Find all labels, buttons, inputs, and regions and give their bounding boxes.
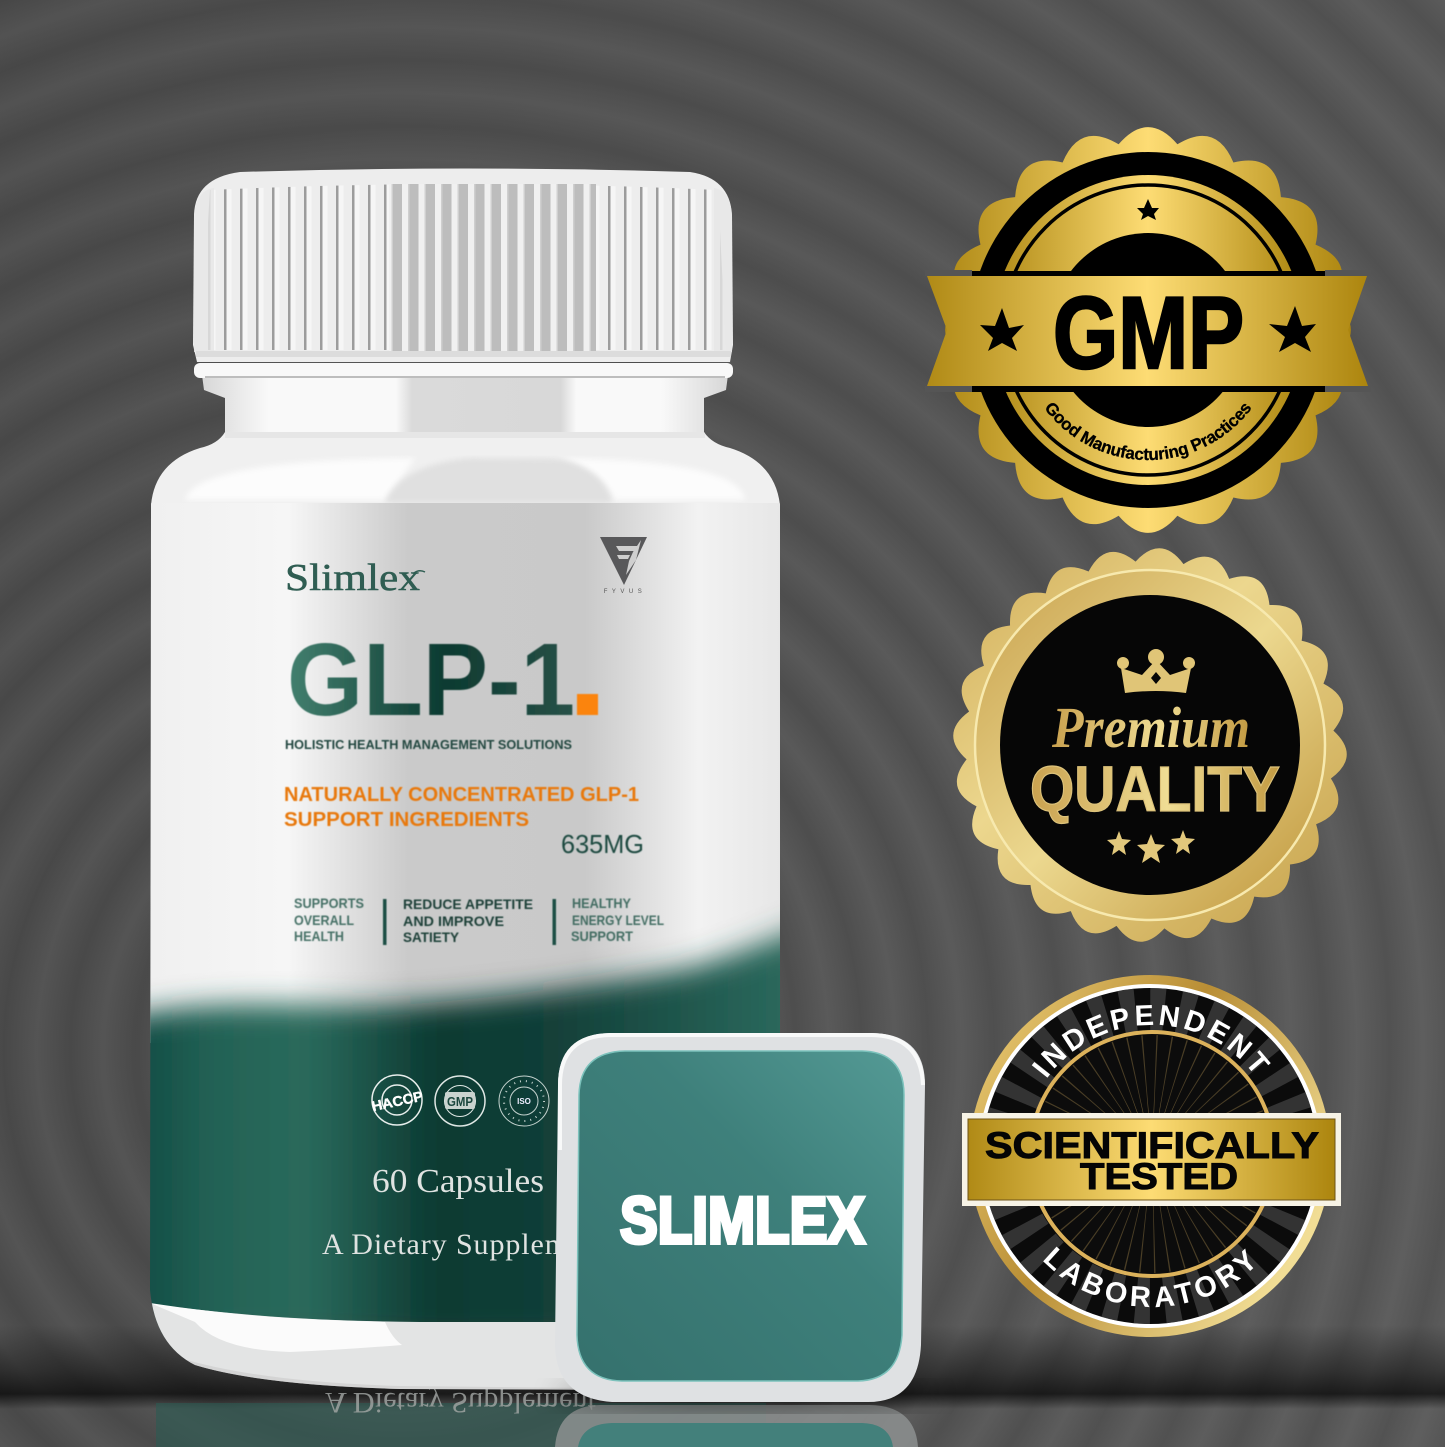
- benefit columns: [294, 895, 664, 945]
- icon: GMP seal: [435, 1076, 485, 1126]
- slimlex box: [555, 1033, 935, 1406]
- benefit 2: SATIETY: [403, 929, 460, 945]
- label text: brand: Slimlex: [285, 557, 420, 599]
- badge: premium quality: [943, 538, 1357, 952]
- stars: [980, 199, 1316, 352]
- benefit 1: [294, 895, 364, 944]
- bottle: [120, 168, 810, 1400]
- badge: GMP: [927, 127, 1368, 533]
- GMP wordmark: GMP: [1053, 276, 1244, 390]
- benefit 3: SUPPORT: [571, 928, 633, 944]
- supplement line: A Dietary Supplement: [322, 1228, 608, 1261]
- product title: GLP-1: [287, 622, 575, 737]
- benefit 3: ENERGY LEVEL: [572, 912, 664, 928]
- certification icons: [370, 1075, 549, 1126]
- icon: ISO seal: [499, 1076, 549, 1126]
- benefit 3: [571, 895, 664, 944]
- orange claim: NATURALLY CONCENTRATED GLP-1: [284, 784, 639, 806]
- bottle body: [150, 432, 780, 1390]
- icon: GMP seal: GMP: [447, 1094, 473, 1109]
- benefit 1: SUPPORTS: [294, 895, 364, 911]
- dosage: 635MG: [561, 831, 644, 859]
- scalloped seal: [943, 538, 1357, 952]
- icon: crown: [1117, 649, 1195, 693]
- badge: scientifically tested: [962, 975, 1341, 1337]
- badge: scientifically tested: LABORATORY: [1043, 1246, 1254, 1308]
- green label band: [120, 925, 810, 1340]
- cap: [193, 168, 733, 378]
- capsule count: 60 Capsules: [372, 1163, 544, 1200]
- cap flange: [194, 363, 733, 378]
- ribbon: [962, 1113, 1341, 1206]
- curved caption: Good Manufacturing Practices: [1046, 403, 1251, 460]
- icon: ISO seal: ISO: [517, 1097, 531, 1106]
- tagline: HOLISTIC HEALTH MANAGEMENT SOLUTIONS: [285, 738, 572, 752]
- benefit 2: AND IMPROVE: [403, 913, 504, 929]
- box frame: [555, 1033, 925, 1402]
- icon: HACCP: HACCP: [370, 1088, 424, 1114]
- orange claim: SUPPORT INGREDIENTS: [284, 809, 529, 831]
- badge: scientifically tested: TESTED: [1080, 1156, 1238, 1197]
- box wordmark: SLIMLEX: [620, 1183, 865, 1257]
- scalloped seal: [945, 127, 1351, 533]
- benefit 2: REDUCE APPETITE: [403, 896, 533, 912]
- sunburst: [1092, 1094, 1212, 1214]
- reflection under bottle: A Dietary Supplement: [325, 1386, 597, 1419]
- premium script: Premium: [1051, 695, 1250, 760]
- reflection under bottle: [156, 1386, 918, 1447]
- ribbon: [927, 276, 1368, 386]
- bottle base: [152, 1304, 574, 1390]
- bottle neck: [202, 375, 728, 440]
- benefit 1: OVERALL: [294, 912, 354, 928]
- ribbon text: SCIENTIFICALLY: [985, 1125, 1319, 1166]
- box face: [577, 1051, 904, 1381]
- benefit 1: HEALTH: [294, 928, 344, 944]
- orange claim: [284, 784, 639, 831]
- stars: [1107, 830, 1195, 863]
- quality word: QUALITY: [1030, 753, 1280, 825]
- icon: HACCP: [370, 1075, 424, 1125]
- icon: FYVUS logo: FYVUS: [604, 589, 646, 595]
- benefit 2: [403, 896, 533, 945]
- benefit 3: HEALTHY: [572, 895, 632, 911]
- icon: FYVUS logo: [600, 537, 647, 595]
- arc text: INDEPENDENT: [1032, 1005, 1271, 1078]
- floor shadow: [0, 1325, 1445, 1409]
